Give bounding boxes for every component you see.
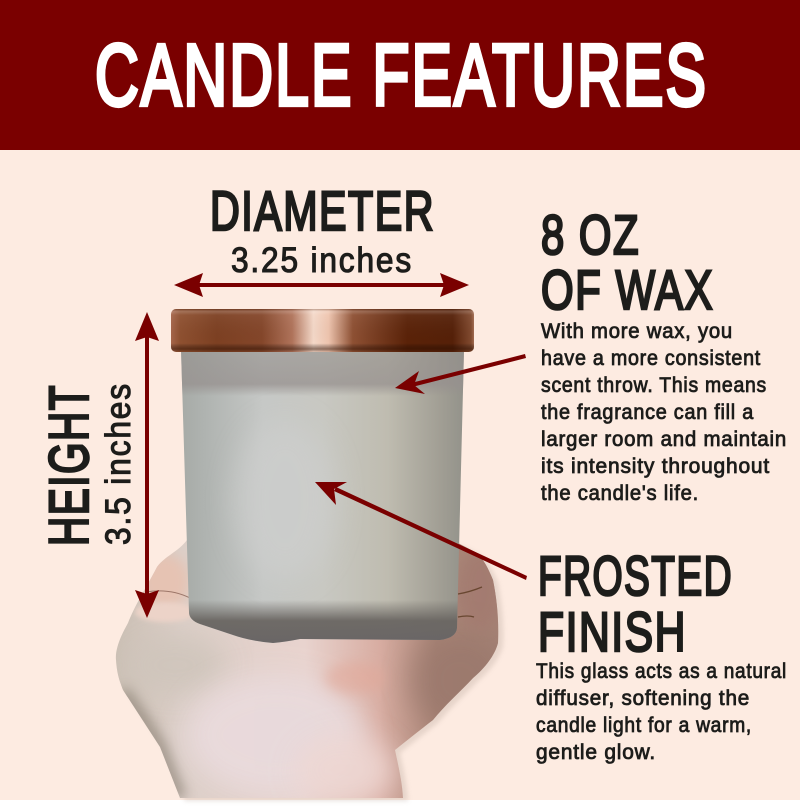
finish heading: FINISH [538,600,687,663]
glass jar [181,352,464,643]
wax description: larger room and maintain [541,428,787,451]
arrow: frosted [315,482,527,580]
8 oz heading: 8 OZ [541,203,640,266]
header banner [0,0,800,150]
height heading: HEIGHT [37,384,100,546]
frosted description [536,660,787,764]
frosted description: candle light for a warm, [536,714,752,737]
of wax heading: OF WAX [541,258,714,321]
arrow: diameter [174,273,469,297]
arrow: wax [395,354,526,394]
arrow: height [135,312,159,618]
copper lid [171,309,474,352]
diameter heading: DIAMETER [210,179,435,242]
frosted description: diffuser, softening the [536,687,750,710]
wax description: its intensity throughout [541,455,770,478]
frosted description: gentle glow. [536,741,656,764]
wax description: the candle's life. [541,482,699,505]
wax description: have a more consistent [541,347,761,370]
wax description: scent throw. This means [541,374,767,397]
hand [100,530,510,805]
wax description: the fragrance can fill a [541,401,754,424]
upper wax band [181,352,464,394]
wax description [541,320,787,505]
lower wax band [188,602,458,643]
candle in hand photo [100,309,510,805]
wax description: With more wax, you [541,320,733,343]
height value: 3.5 inches [99,382,138,545]
diameter value: 3.25 inches [231,241,413,280]
